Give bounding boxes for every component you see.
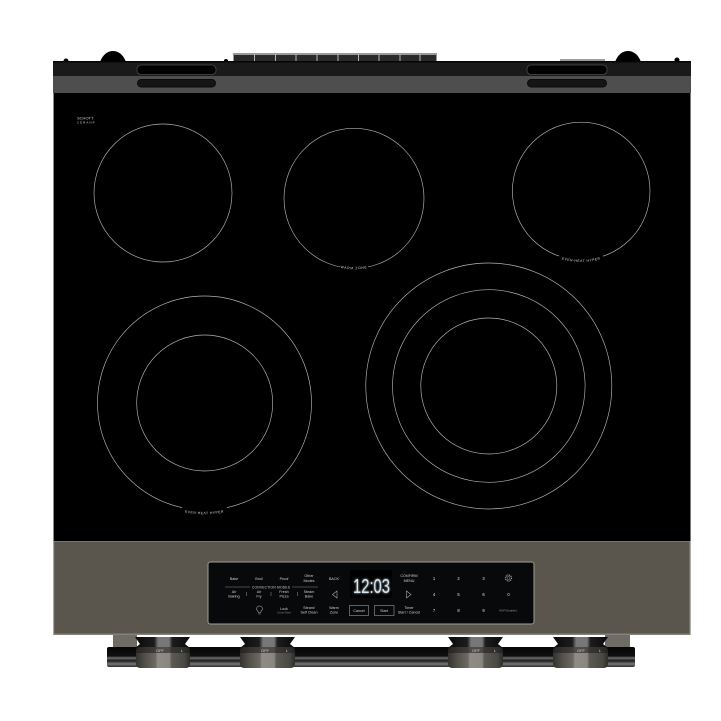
- icon: left arrow: [332, 591, 337, 598]
- convection modes group: Air: [232, 590, 237, 594]
- bottom row keys: Steam/: [303, 606, 316, 610]
- icon: light bulb: [257, 606, 262, 614]
- burner: front left dual: [97, 296, 312, 514]
- number keypad: 8: [457, 608, 460, 613]
- mode keys: Modes: [303, 579, 315, 583]
- icon: right arrow: [406, 591, 411, 598]
- knob 1: OFF: [156, 648, 165, 653]
- convection modes group: CONVECTION MODES: [252, 586, 291, 590]
- knob 4: L: [599, 648, 602, 653]
- convection modes group: [225, 586, 318, 598]
- number keypad: 0: [507, 592, 510, 597]
- rail brackets: [113, 635, 630, 649]
- glass cooktop: [53, 93, 691, 541]
- bottom row keys: Start: [380, 609, 388, 613]
- rear vent backsplash: [233, 53, 437, 62]
- bottom row keys: Start / Cancel: [398, 610, 420, 614]
- number keypad: 3: [482, 576, 485, 581]
- number keypad: 6: [482, 592, 485, 597]
- number keypad: [433, 576, 510, 613]
- knob 4: [553, 637, 608, 668]
- wi-fi enabled label: Wi-Fi Enabled: [499, 608, 517, 612]
- burner: rear centre warm zone: WARM ZONE: [340, 266, 367, 270]
- oven handle rail: [107, 647, 635, 667]
- convection modes group: Steam: [304, 590, 314, 594]
- bottom row keys: Warm: [329, 606, 339, 610]
- knob 2: L: [286, 648, 289, 653]
- burner: rear right: [512, 122, 650, 262]
- burner: front right triple: [366, 263, 612, 509]
- mode keys: [230, 574, 340, 583]
- burner: rear left: [94, 124, 232, 262]
- rear feet and bumps: [64, 51, 680, 64]
- knob 3: OFF: [472, 648, 481, 653]
- bottom row keys: Lock: [280, 607, 288, 611]
- logo: Schott Ceran: SCHOTT: [77, 116, 94, 120]
- mode keys: Other: [304, 574, 314, 578]
- convection modes group: Air: [257, 590, 262, 594]
- bottom row keys: Control Panel: [277, 612, 291, 614]
- control panel: [208, 562, 534, 624]
- mode keys: Broil: [255, 577, 263, 581]
- number keypad: 7: [433, 608, 436, 613]
- mode keys: Proof: [280, 577, 289, 581]
- convection modes group: Bake: [305, 594, 313, 598]
- bottom row keys: [277, 606, 420, 616]
- front control fascia: [53, 541, 691, 635]
- convection modes group: Fry: [256, 594, 262, 598]
- logo: Schott Ceran: CERAN®: [77, 120, 96, 124]
- knob 2: OFF: [261, 648, 270, 653]
- mode keys: Bake: [230, 577, 238, 581]
- burner: rear centre warm zone: [284, 128, 424, 270]
- right vents: [527, 65, 607, 87]
- knob 4: OFF: [577, 648, 586, 653]
- confirm menu key: CONFIRM: [400, 574, 418, 578]
- clock display: 12:03: [353, 575, 390, 598]
- bottom row keys: Cancel: [353, 609, 365, 613]
- bottom row keys: Zone: [330, 610, 338, 614]
- number keypad: 4: [433, 592, 436, 597]
- confirm menu key: MENU: [404, 579, 415, 583]
- confirm menu key: [400, 574, 418, 583]
- knob 3: L: [494, 648, 497, 653]
- knob 2: [240, 637, 295, 668]
- bottom row keys: Timer: [404, 606, 414, 610]
- left vents: [137, 65, 216, 87]
- clock display: [350, 570, 392, 598]
- mode keys: BACK: [329, 577, 340, 581]
- burner: front left dual: EVEN-HEAT HYPER: [185, 510, 224, 514]
- number keypad: 5: [457, 592, 460, 597]
- convection modes group: Pizza: [279, 594, 289, 598]
- knob 1: [135, 637, 190, 668]
- icon: settings gear: [506, 575, 512, 581]
- burner: rear right: EVEN-HEAT HYPER: [562, 257, 600, 262]
- number keypad: 1: [433, 576, 436, 581]
- convection modes group: Baking: [228, 594, 240, 598]
- bottom row keys: Self Clean: [300, 610, 318, 614]
- top trim band: [53, 61, 691, 94]
- number keypad: 9: [482, 608, 485, 613]
- logo: Schott Ceran: [77, 116, 96, 124]
- knob 3: [448, 637, 503, 668]
- knob 1: L: [181, 648, 184, 653]
- number keypad: 2: [457, 576, 460, 581]
- convection modes group: Fresh: [279, 590, 289, 594]
